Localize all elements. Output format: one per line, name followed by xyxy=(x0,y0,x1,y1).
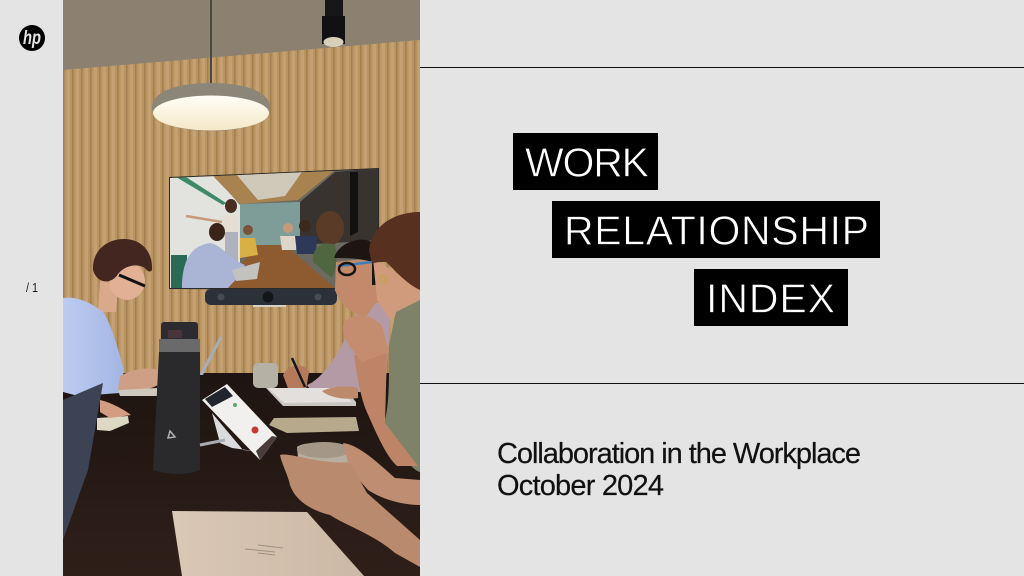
man with glasses xyxy=(283,240,392,392)
wall screen showing video call xyxy=(169,168,379,290)
woman's hand xyxy=(100,400,131,418)
slatted wooden wall xyxy=(63,40,420,400)
mug held in hands xyxy=(297,442,348,462)
title line: WORK xyxy=(513,133,658,190)
notebook on table xyxy=(97,416,129,431)
page number: / 1 xyxy=(26,281,38,295)
woman with glasses xyxy=(63,239,158,396)
colleagues on screen xyxy=(240,211,344,278)
notebook with glasses xyxy=(269,417,359,433)
cylindrical conference speaker xyxy=(153,322,200,474)
coffee cup on table xyxy=(253,363,278,388)
man with laptop xyxy=(182,223,260,288)
bottom divider xyxy=(420,383,1024,384)
title line: INDEX: INDEX xyxy=(706,276,835,322)
video soundbar xyxy=(205,289,337,307)
closed silver laptop with hp mark xyxy=(172,511,364,576)
subtitle: Collaboration in the Workplace xyxy=(497,438,861,470)
presenter standing xyxy=(186,199,239,262)
HP logo xyxy=(19,25,45,51)
photo: meeting room xyxy=(63,0,420,576)
front hand and forearm xyxy=(280,455,420,567)
foreground dark laptop xyxy=(63,383,103,540)
title: work relationship index xyxy=(513,133,880,326)
pendant lamp xyxy=(152,0,270,131)
top divider xyxy=(420,67,1024,68)
ceiling spotlight xyxy=(322,0,345,47)
subtitle xyxy=(497,438,861,502)
woman's laptop xyxy=(118,336,222,396)
title line: WORK: WORK xyxy=(525,140,649,186)
tablet on stand xyxy=(200,384,277,460)
back hand and forearm xyxy=(343,443,420,505)
title line: INDEX xyxy=(694,269,848,326)
HP logo: hp xyxy=(23,28,41,49)
woman in olive top xyxy=(343,212,420,472)
title line: RELATIONSHIP: RELATIONSHIP xyxy=(564,208,869,254)
ceiling xyxy=(63,0,420,72)
table xyxy=(63,373,420,576)
subtitle: October 2024 xyxy=(497,470,664,502)
laptop and notes with hand xyxy=(266,386,358,406)
